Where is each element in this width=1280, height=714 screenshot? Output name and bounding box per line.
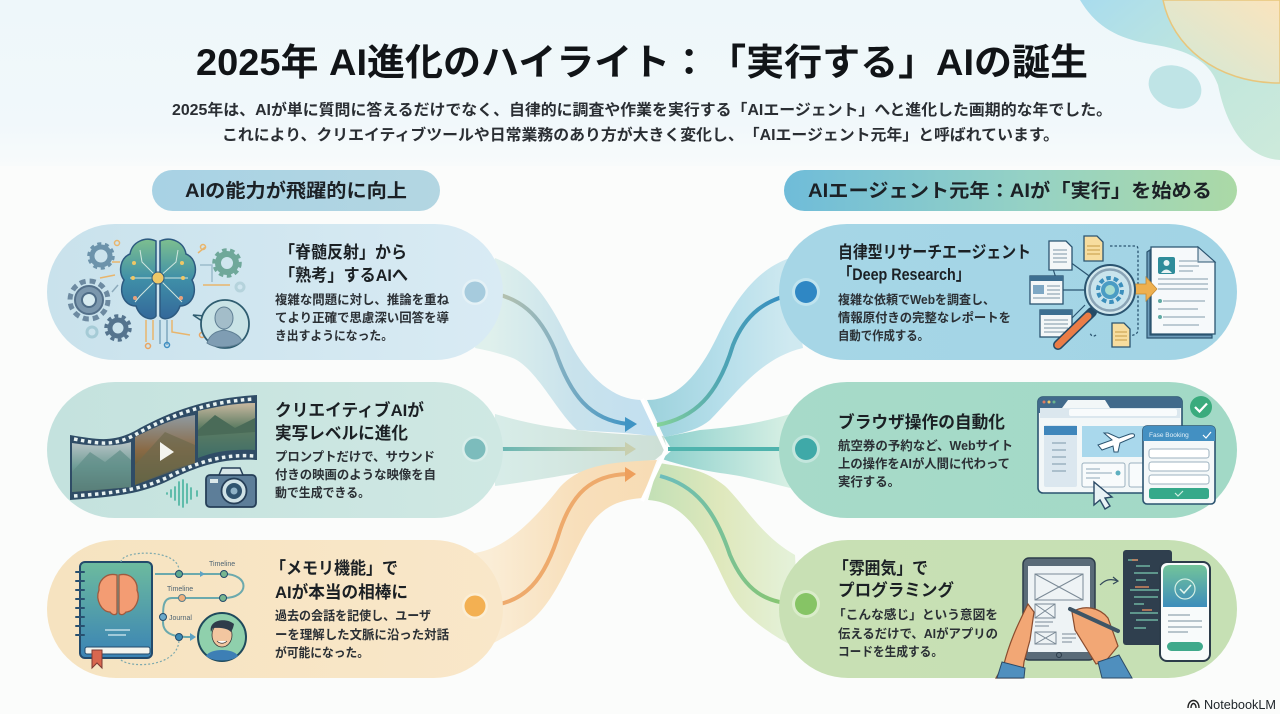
- intro text: これにより、クリエイティブツールや日常業務のあり方が大きく変化し、「AIエージェント元年」と呼ばれています。: [222, 125, 1059, 144]
- text: panel 3 body: [275, 608, 449, 660]
- convergence flow bands: [475, 258, 803, 650]
- text: panel 1 body: てより正確で思慮深い回答を導: [275, 310, 449, 325]
- text: panel 5 body: 実行する。: [838, 474, 900, 489]
- text: panel 6 heading: プログラミング: [838, 580, 954, 600]
- intro text: [172, 100, 1112, 144]
- arrow: bottom right flow: [660, 476, 800, 604]
- text: panel 3 body: 過去の会話を記使し、ユーザ: [275, 608, 431, 623]
- icon: tablet wireframe with hands: [996, 558, 1132, 678]
- icon: green check badge: [1190, 396, 1212, 418]
- decorative corner blobs: [1080, 0, 1280, 160]
- header band: [0, 0, 1280, 166]
- text: panel 3 body: が可能になった。: [275, 645, 369, 660]
- text: panel 5 body: [838, 438, 1013, 489]
- node: panel 5: [792, 435, 820, 463]
- text: panel 1 body: [275, 292, 449, 343]
- diagram: memory timeline: Journal: [169, 615, 192, 622]
- text: panel 3 heading: [270, 558, 408, 602]
- text: panel 3 heading: 「メモリ機能」で: [270, 558, 398, 578]
- panel: browser automation: [779, 382, 1237, 518]
- text: panel 2 body: プロンプトだけで、サウンド: [275, 450, 435, 464]
- icon: user avatar: [198, 613, 246, 661]
- panel: creative AI: [47, 382, 503, 518]
- text: panel 1 heading: [279, 242, 408, 285]
- text: panel 4 heading: 自律型リサーチエージェント: [838, 242, 1031, 262]
- title: 2025年 AI進化のハイライト：「実行する」AIの誕生: [196, 42, 1088, 83]
- centre chevron: [642, 399, 666, 501]
- footer brand: NotebookLM: NotebookLM: [1204, 698, 1276, 712]
- heading: left column: [152, 170, 440, 211]
- diagram: memory timeline: Timeline: [209, 561, 235, 568]
- text: panel 1 body: き出すようになった。: [275, 329, 393, 343]
- panel: reflex to deliberation: [47, 224, 503, 360]
- node: panel 2: [462, 436, 488, 462]
- text: panel 6 body: [833, 607, 998, 659]
- icon: film strip: [70, 395, 257, 500]
- icon: browser window with booking form: [1038, 397, 1215, 509]
- text: panel 6 heading: [833, 559, 954, 600]
- arrow: middle left flow: [485, 442, 636, 456]
- arrow: middle right flow: [668, 447, 800, 451]
- text: panel 1 heading: 「熟考」するAIへ: [279, 265, 408, 285]
- panel: deep research: [779, 224, 1237, 360]
- diagram: memory timeline: [121, 553, 244, 665]
- text: panel 5 body: 上の操作をAIが人間に代わって: [838, 456, 1010, 471]
- text: panel 2 heading: クリエイティブAIが: [275, 400, 424, 420]
- panel: memory feature: [47, 540, 503, 678]
- arrow: top left flow: [485, 292, 637, 432]
- icon: sound wave: [167, 480, 197, 507]
- text: panel 6 body: 「こんな感じ」という意図を: [833, 607, 998, 622]
- icon: smartphone app: [1160, 562, 1210, 661]
- icon: brain with gears: [70, 239, 249, 348]
- text: panel 6 body: コードを生成する。: [838, 644, 943, 659]
- text: panel 4 heading: [838, 242, 1031, 284]
- intro text: 2025年は、AIが単に質問に答えるだけでなく、自律的に調査や作業を実行する「AIエージェント」へと進化した画期的な年でした。: [172, 100, 1112, 119]
- heading: right column: AIエージェント元年：AIが「実行」を始める: [808, 179, 1212, 202]
- text: panel 2 heading: 実写レベルに進化: [275, 424, 408, 443]
- text: panel 3 body: ーを理解した文脈に沿った対話: [275, 627, 449, 642]
- text: panel 6 heading: 「雰囲気」で: [833, 559, 928, 578]
- icon: browser window with booking form: Fase Booking: [1149, 432, 1189, 439]
- text: panel 2 heading: [275, 400, 424, 443]
- text: panel 4 body: 情報原付きの完整なレポートを: [838, 310, 1011, 325]
- icon: research magnifier and report: [1030, 236, 1215, 347]
- icon: code editor: [1123, 550, 1172, 645]
- text: panel 2 body: 付きの映画のような映像を自: [275, 467, 436, 482]
- arrow: top right flow: [657, 293, 800, 425]
- panel: vibe coding: [779, 540, 1237, 678]
- text: panel 5 body: 航空券の予約など、Webサイト: [838, 438, 1013, 453]
- icon: journal with brain: [76, 562, 152, 668]
- text: panel 3 heading: AIが本当の相棒に: [275, 582, 408, 602]
- text: panel 2 body: [275, 450, 436, 500]
- text: panel 6 body: 伝えるだけで、AIがアプリの: [838, 626, 998, 641]
- node: panel 3: [462, 593, 488, 619]
- text: panel 1 heading: 「脊髄反射」から: [279, 242, 407, 262]
- text: panel 4 heading: 「Deep Research」: [838, 265, 970, 284]
- text: panel 4 body: [838, 292, 1011, 343]
- icon: camera: [206, 468, 256, 507]
- diagram: memory timeline: Timeline: [167, 586, 193, 593]
- arrow: bottom left flow: [485, 467, 636, 606]
- node: panel 6: [792, 590, 820, 618]
- text: panel 4 body: 自動で作成する。: [838, 328, 929, 343]
- heading: right column: [784, 170, 1237, 211]
- heading: left column: AIの能力が飛躍的に向上: [185, 179, 407, 202]
- text: panel 1 body: 複雑な問題に対し、推論を重ね: [275, 292, 449, 307]
- node: panel 4: [792, 278, 820, 306]
- text: panel 5 heading: ブラウザ操作の自動化: [838, 412, 1005, 432]
- text: panel 2 body: 動で生成できる。: [275, 485, 370, 500]
- node: panel 1: [462, 279, 488, 305]
- text: panel 4 body: 複雑な依頼でWebを調査し、: [838, 292, 995, 307]
